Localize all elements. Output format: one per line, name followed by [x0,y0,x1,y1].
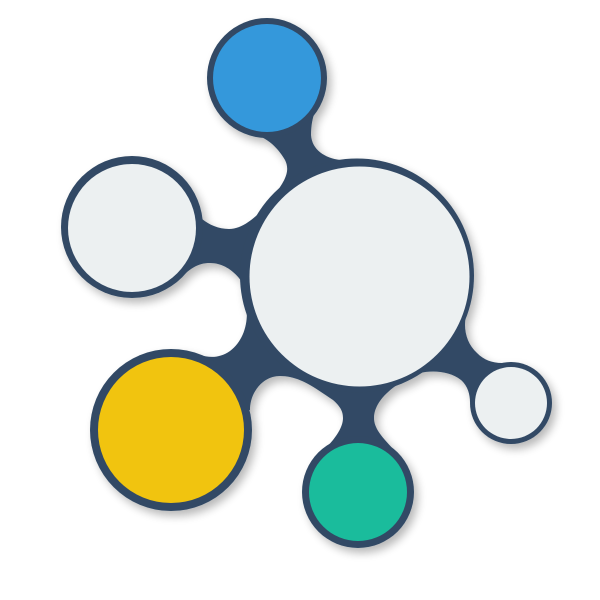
connector: yellow and green to main [180,300,397,457]
circle: left gray [68,164,196,292]
circle: green [309,443,407,541]
circle outline: blue [207,18,327,138]
connector: left to main [150,200,300,300]
circle: yellow [98,357,244,503]
circle: main gray [250,166,470,386]
circle outline: left [61,156,203,298]
dark connector network [61,18,552,548]
circle: blue [213,24,321,132]
connector: main to small circle [380,300,510,402]
circle outline: small [470,362,552,444]
connector: blue to main [250,100,340,200]
circle outline: green [302,436,414,548]
circle outline: yellow [90,349,252,511]
circle: small gray [475,367,547,439]
circle outline: main [240,158,474,392]
